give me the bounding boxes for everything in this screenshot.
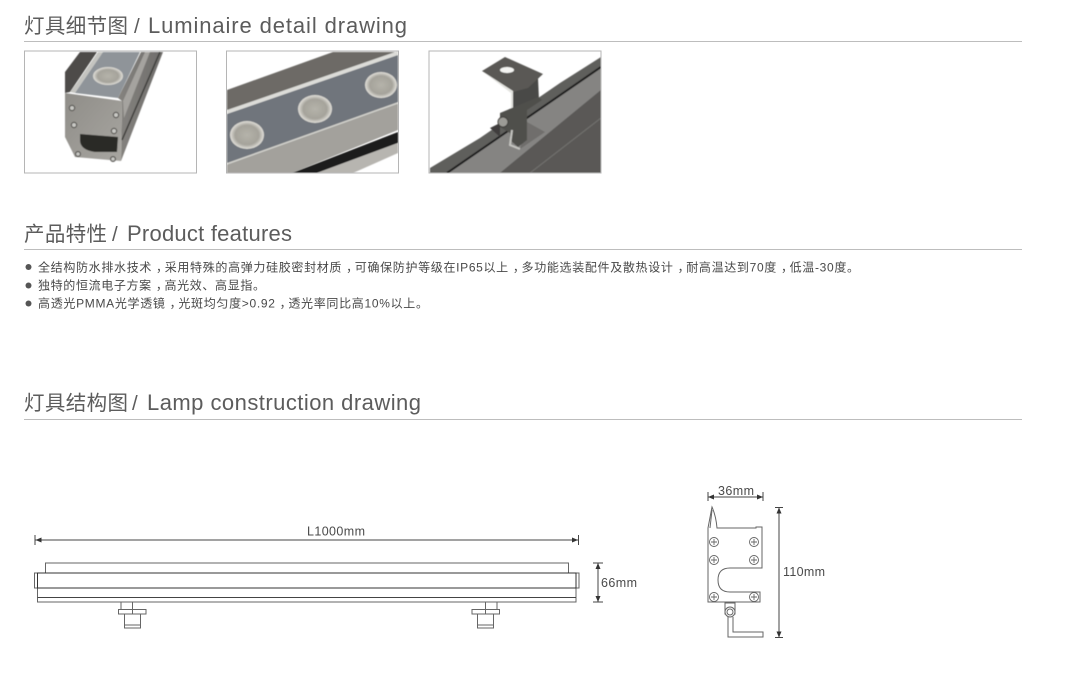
heading: Product features [24, 221, 1022, 250]
heading: Luminaire detail drawing: / [134, 15, 140, 38]
dimension: height 110mm: 110mm [783, 565, 825, 579]
end plate outline [708, 507, 763, 637]
bracket top plate [482, 57, 543, 92]
dimension: height 110mm [775, 508, 825, 638]
heading: Lamp construction drawing: 灯具结构图 [24, 392, 128, 415]
feature list [26, 260, 859, 310]
dimension: width 36mm: 36mm [718, 484, 754, 498]
right mounting foot [472, 602, 500, 628]
dimension: height 66mm [593, 563, 637, 602]
heading: Product features: / [112, 223, 118, 246]
end view drawing [708, 484, 825, 638]
heading: Lamp construction drawing: Lamp construction drawing [147, 390, 421, 415]
side view drawing [34, 524, 637, 628]
clamp [500, 97, 542, 147]
lamp body [34, 563, 579, 602]
photo: mounting bracket [429, 51, 601, 173]
heading: Lamp construction drawing: / [132, 392, 138, 415]
screws [710, 538, 758, 602]
heading: Luminaire detail drawing: 灯具细节图 [24, 15, 128, 38]
feature 2: 独特的恒流电子方案 ，高光效、高显指。 [38, 278, 265, 292]
heading: Product features: Product features [127, 221, 292, 246]
heading: Lamp construction drawing [24, 390, 1022, 420]
dimension: width 36mm [708, 484, 763, 501]
photo: luminaire end plate [24, 51, 196, 173]
foot [520, 122, 545, 149]
photo: lens close-up [226, 51, 398, 173]
dimension: length 1000mm: L1000mm [307, 524, 365, 538]
heading: Luminaire detail drawing [24, 13, 1022, 42]
heading: Luminaire detail drawing: Luminaire detail drawing [148, 13, 407, 38]
heading: Product features: 产品特性 [24, 223, 107, 246]
feature 1: 全结构防水排水技术 ，采用特殊的高弹力硅胶密封材质 ，可确保防护等级在IP65以上 ，多功能选装配件及散热设计 ，耐高温达到70度 ，低温-30度。 [38, 260, 859, 274]
feature 3: 高透光PMMA光学透镜 ，光斑均匀度>0.92 ，透光率同比高10%以上。 [38, 296, 428, 310]
bracket upright [513, 78, 539, 112]
left mounting foot [118, 602, 146, 628]
dimension: height 66mm: 66mm [601, 576, 637, 590]
